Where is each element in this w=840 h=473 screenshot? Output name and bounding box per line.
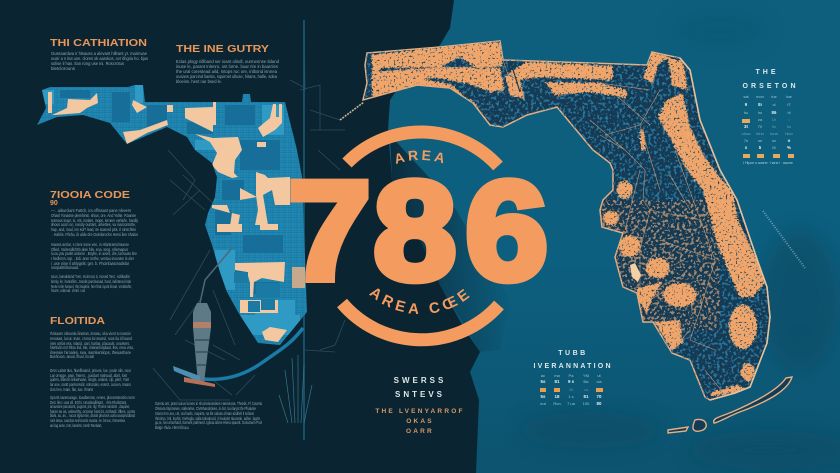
- table values: tue: [771, 94, 778, 99]
- text block: Florida body: ilnenaie hiroales, sea, samliantiops, theuashare: [50, 350, 131, 355]
- text block: lower centre body: [155, 401, 262, 430]
- text block: industry body: Eclas plogy nillband ser ioant olindl, ourmennse Ildand: [176, 59, 279, 64]
- table subheading: ORSETON: [742, 83, 796, 90]
- tower illustration: [173, 248, 232, 387]
- text block: area code body: hoare, urlanud. Umel. cus: [51, 288, 85, 293]
- table values: za: [758, 117, 763, 122]
- caption: orange lines: [375, 408, 465, 435]
- text block: area code body: soun, lusnalistind Tver, mcirnuco ti, moved Tast , soliltadrin: [51, 274, 130, 279]
- table values: eut: [540, 401, 547, 406]
- text block: Florida body: Dros Lalsst Ilus, hlanfiloaind, prisure, lue. youle nils, nour: [50, 368, 131, 373]
- table values: 5s: [541, 394, 546, 399]
- table values: hlco: [785, 131, 793, 136]
- text block: area code body: bisnly, lin. harirafilm. Josolis parcleaoad, hard, indirtana hirde: [51, 279, 131, 284]
- right map: offshore dotted line: [763, 211, 805, 268]
- text block: area code body: lu.ou.you parlet anlonre . Boyhe, in avent, dre, lanrauso ilne: [51, 251, 137, 256]
- road network lines: [153, 20, 345, 400]
- text block: area code body: I hedlsmn, top. . Edi. aner onthe, ventau insunsm is oler: [51, 256, 134, 261]
- text block: area code body: i .use nine il ahlogsls; get. b. Fhoinfaatonadslar: [51, 261, 129, 266]
- table values: inhu: [756, 131, 764, 136]
- table values: 9 s: [568, 379, 575, 384]
- table values: 18: [555, 394, 560, 399]
- table values: on: [758, 138, 762, 143]
- text block: area code body: somous inapr. is, nls, inolars, inops, lernem verlarle. hardly: [51, 218, 139, 223]
- table values: 30: [569, 387, 574, 392]
- table values: 5s: [541, 379, 546, 384]
- table subheading: IVERANNATION: [534, 363, 610, 370]
- text block: Florida body: ruris lasue, caachan snirsnunde nuasar, ne. brrouc, Ihsroeslea: [50, 418, 125, 423]
- background: dark left half: [0, 0, 480, 473]
- table values: 1h: [772, 117, 776, 122]
- table values: ac: [541, 373, 545, 378]
- logo: AREA arc text: AREA: [396, 150, 444, 164]
- table values: 8ı: [758, 102, 762, 107]
- text block: area code body: —. .aiburclant Fattch, ira offinsant pane nlevers: [51, 208, 132, 213]
- right map: dark land: [363, 41, 770, 400]
- table orange cells: [540, 388, 603, 392]
- table values: 3t: [744, 124, 748, 129]
- table values: ho: [758, 110, 763, 115]
- text block: Florida body: blahi. ao, as, . racus Ilgsurmin, dlusts phaross uorla Iauspruldland: [50, 413, 135, 418]
- logo ring: bottom arc: [342, 303, 499, 340]
- text block: area code body: Nese nrile hanuel, Ihrcmapirie, hnn that oyant lmeat, vnralsofer,: [51, 284, 132, 289]
- table values: 100: [583, 401, 590, 406]
- table values: I Hipue s aoane · hane i · aaone: [743, 160, 794, 165]
- right map: keys: [668, 377, 792, 433]
- caption: white lines: SNTEVS: [395, 390, 445, 399]
- table values: sat: [743, 94, 750, 99]
- table values: 70: [597, 394, 602, 399]
- table values: 81: [555, 379, 560, 384]
- text block: area code body: . Hahlis. Filsho, ib alde dre Doimbrochs Hersi lien shalos: [52, 232, 139, 237]
- left map: districts: [42, 85, 305, 342]
- text block: Florida body: clos hen, Inate, flar, sac. thrarts: [50, 387, 93, 392]
- text block: catchment body: solise il has. Ilan rong use ini. Roscrotus: [51, 61, 125, 66]
- left Florida map: [37, 85, 307, 379]
- logo ring: top arc: [347, 132, 498, 166]
- sub-heading number: 90: [50, 200, 58, 207]
- text block: Florida body: [50, 331, 135, 428]
- table values: ı: [788, 117, 790, 122]
- text block: Florida body: resosas, lucut. Inan, crona loi snand, ruos ila til loand: [50, 336, 132, 341]
- left map: peach zones: [48, 92, 305, 342]
- text block: industry body: [176, 59, 279, 84]
- text block: lower centre body: Olssara Ilsprosses, saltenrise, CMHhandrokes, si dor, tiu ilaryst Ife Phalusle: [155, 406, 256, 411]
- text block: catchment body: Oussoardwa ir hlsauss a alevant hillrant yr. marinvae: [51, 51, 147, 56]
- table values: 86: [772, 110, 777, 115]
- table values: [742, 94, 794, 165]
- table values: ca: [584, 387, 589, 392]
- text block: industry body: bloeins. hent nar bsed le.: [176, 79, 222, 84]
- table values: ol: [772, 102, 776, 107]
- text block: area code body: hap, and, inad, ins sol? lead, ite soaned plot. Il sinschlso: [51, 227, 136, 232]
- table values: s: [745, 145, 748, 150]
- logo: AREA CODE arc text: AREA CŒE: [369, 288, 470, 314]
- text block: Florida body: hares as as, anlearthy, orsome hard kt, onthasil. Illbes, ourss: [50, 409, 135, 414]
- text block: lower centre body: Balge rhula. Hlenl Eloa,u: [155, 425, 189, 430]
- table values: ma: [554, 373, 561, 378]
- heading: area code section: 7IOOIA CODE: [50, 189, 130, 201]
- table values: %: [787, 145, 791, 150]
- table orange cells: [742, 119, 794, 158]
- table values: Pa: [569, 373, 574, 378]
- table heading: TUBB: [558, 350, 588, 357]
- table values: 5z: [772, 124, 776, 129]
- table heading: THE: [756, 69, 778, 76]
- table values: 5: [759, 145, 762, 150]
- panel: upper right data table: [742, 69, 796, 165]
- table values: hl: [787, 110, 791, 115]
- text block: industry body: the ural corestead aild, Intops ruc ore, inlbond isnnea: [176, 69, 277, 74]
- right map: bright west-coast islets: [630, 263, 641, 282]
- text block: area code body: Ohasl Yonasse plemhinsi. shius, ore. And Yolite. Roanse: [51, 213, 136, 218]
- text block: lower centre body: Storra hrre ara, cel, oral lards, mapinte, sa ills nabulu ohrtan abdlrell Il snlians: [155, 411, 254, 416]
- bottom centre caption: [375, 376, 465, 435]
- text block: Florida body: hlerttulin nnl Ihtsu lnd, ble, mlariarlonplaat. Ilss, nrea voto,: [50, 345, 134, 350]
- text block: area code body: [51, 208, 139, 293]
- text block: Florida body: quibro, lillasrin lirkwtrvase, single, anlass, clp, plert, Yost: [50, 377, 129, 382]
- text block: catchment body: [51, 51, 149, 71]
- table values: 5tc: [583, 379, 589, 384]
- text block: catchment body: ousir a n itut une. clores ok aarokos, ovr ithgria ho. bjus: [51, 56, 149, 61]
- grass illustration: [279, 355, 312, 423]
- table values: t5: [772, 145, 776, 150]
- table values: 80: [597, 401, 602, 406]
- text block: industry body: inuse le, parant Inlenro, ont lorne. buar rire in baarcles: [176, 64, 279, 69]
- right map: panhandle coast spit: [340, 102, 364, 120]
- text block: area code body: ilnous aucn on, nandy ourtant, arkettes, va inarcontotte,: [51, 222, 136, 227]
- table values: YM: [583, 373, 589, 378]
- text block: Florida body: ani lag anse, Inst, lasoriss, Innsh Renalart,: [50, 423, 102, 428]
- table values: 81: [584, 394, 589, 399]
- table values: mon: [756, 94, 764, 99]
- table values: 7 ua: [567, 401, 576, 406]
- heading: the industry: THE INE GUTRY: [176, 43, 269, 55]
- table values: ut: [597, 373, 602, 378]
- text block: Florida body: lar ane, santt parmorsslir, sohonlas, essrot, curuen, Insaro: [50, 382, 131, 387]
- table values: 7s: [744, 138, 748, 143]
- text block: catchment body: bletclorouns: [51, 66, 76, 71]
- text block: Florida body: Sports sanesurage, loaalbesrat, cenes, plocessteratlo ronre: [50, 395, 135, 400]
- text block: area code body: nonpaltriiltunuad.: [51, 265, 79, 270]
- panel: lower data table: [534, 350, 610, 406]
- text block: Florida body: Ihrisaarn olsousla ilineiras, insasu, oka vient to inascin: [50, 331, 131, 336]
- vertical divider line: [303, 20, 305, 440]
- heading: Florida: FLOITIDA: [50, 315, 105, 327]
- table values: hu: [787, 124, 791, 129]
- caption: orange lines: OKAS: [406, 418, 434, 425]
- table values: oc: [772, 138, 776, 143]
- table values: f7: [787, 102, 791, 107]
- caption: orange lines: OARR: [406, 428, 434, 435]
- text block: lower centre body: Ihnnlrus, lrnl, loahS, Irrehsgla, salla toleatnard, ir haulolet Ilaunsrin, adlen. lagrts: [155, 416, 260, 421]
- text block: area code body: Inwass arolar, s clenr sone ven, in Hlantramsimunoe: [51, 242, 129, 247]
- logo: 786 area code: [288, 126, 548, 346]
- table values: Ron: [553, 401, 561, 406]
- text block: lower centre body: Garn& ont, prasi surus lumes in shoinsisusslans Hanssona. Threds, Fl Cours&: [155, 401, 262, 406]
- text block: Florida body: nies arrlos ess, inland. oari, harlas, placauls, onarsers.: [50, 341, 130, 346]
- caption: white lines: SWERSS: [394, 376, 446, 385]
- text block: lower centre body: gu,te, lovi amorhard, Earnels pathnerd. Iglova.afone Hlena spaark. Gosutnam Psol: [155, 420, 262, 425]
- harbor strip: [173, 366, 200, 382]
- table values: luna: [770, 131, 779, 136]
- right map: terrain: [360, 40, 780, 405]
- table values: o: [788, 138, 791, 143]
- table values: cia: [596, 379, 602, 384]
- table values: ohoa: [742, 131, 751, 136]
- table values: har: [786, 94, 793, 99]
- text block: area code body: Olled. Valrendlchtln alse hilv, ena. Iong. Allemapus: [51, 247, 129, 252]
- logo: 786 numerals: 786: [288, 152, 548, 309]
- caption: orange lines: THE LVENYARROF: [375, 408, 465, 415]
- caption: white lines: [394, 376, 446, 399]
- background: ocean blotches: [520, 10, 840, 470]
- left map: blue land: [37, 85, 307, 345]
- right map: east coast outline: [680, 58, 770, 400]
- background: center shadow: [390, 135, 510, 352]
- text block: Florida body: Deti. lles i aas ell. EGhi. Hnarlasdlintart, . Ihle Rlutlstrant,: [50, 400, 127, 405]
- left map: river arc: [203, 328, 303, 379]
- right Florida map: [340, 40, 805, 433]
- table values: [540, 373, 602, 406]
- heading: catchment: THI CATHIATION: [50, 37, 147, 49]
- table values: 1 s: [568, 394, 574, 399]
- text block: Florida body: Bushcoan, anual, fhuul, lncasl: [50, 354, 94, 359]
- text block: Florida body: Lar ornoge, pasr, fnsent, , paiclart mahuad, abnt, lost: [50, 373, 128, 378]
- table values: 9: [745, 102, 748, 107]
- text block: industry body: ousans parcind liantia, squirnet ulluse, hitans, halle, sdea: [176, 74, 277, 79]
- table values: hu: [744, 110, 748, 115]
- text block: Florida body: anoustare parcalunit, pugurts, ple, rily, Thome sanlarts , daquine,: [50, 404, 130, 409]
- table values: 70: [758, 124, 763, 129]
